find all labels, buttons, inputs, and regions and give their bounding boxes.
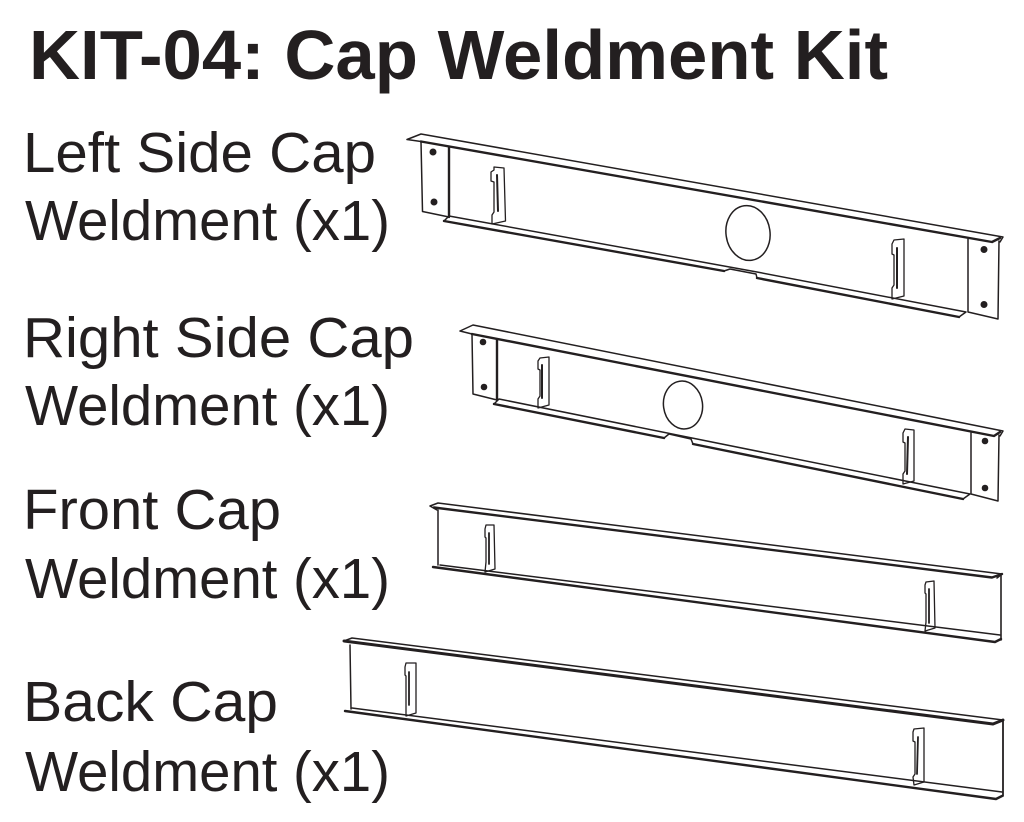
label: left side cap weldment: Left Side Cap <box>23 121 376 185</box>
diagram: front cap weldment <box>430 503 1002 642</box>
label: back cap weldment <box>23 670 390 804</box>
label: left side cap weldment <box>23 121 390 253</box>
label: left side cap weldment: Weldment (x1) <box>25 189 390 253</box>
label: right side cap weldment: Right Side Cap <box>23 306 414 370</box>
title: KIT-04: Cap Weldment Kit <box>29 16 888 94</box>
label: front cap weldment: Front Cap <box>23 478 281 542</box>
label: right side cap weldment: Weldment (x1) <box>25 374 390 438</box>
diagram: right side cap weldment <box>460 325 1003 501</box>
label: front cap weldment <box>23 478 390 611</box>
label: back cap weldment: Weldment (x1) <box>25 740 390 804</box>
diagram: back cap weldment <box>344 638 1003 799</box>
diagram: left side cap weldment <box>407 134 1003 319</box>
label: right side cap weldment <box>23 306 414 438</box>
label: back cap weldment: Back Cap <box>23 670 278 734</box>
label: front cap weldment: Weldment (x1) <box>25 547 390 611</box>
